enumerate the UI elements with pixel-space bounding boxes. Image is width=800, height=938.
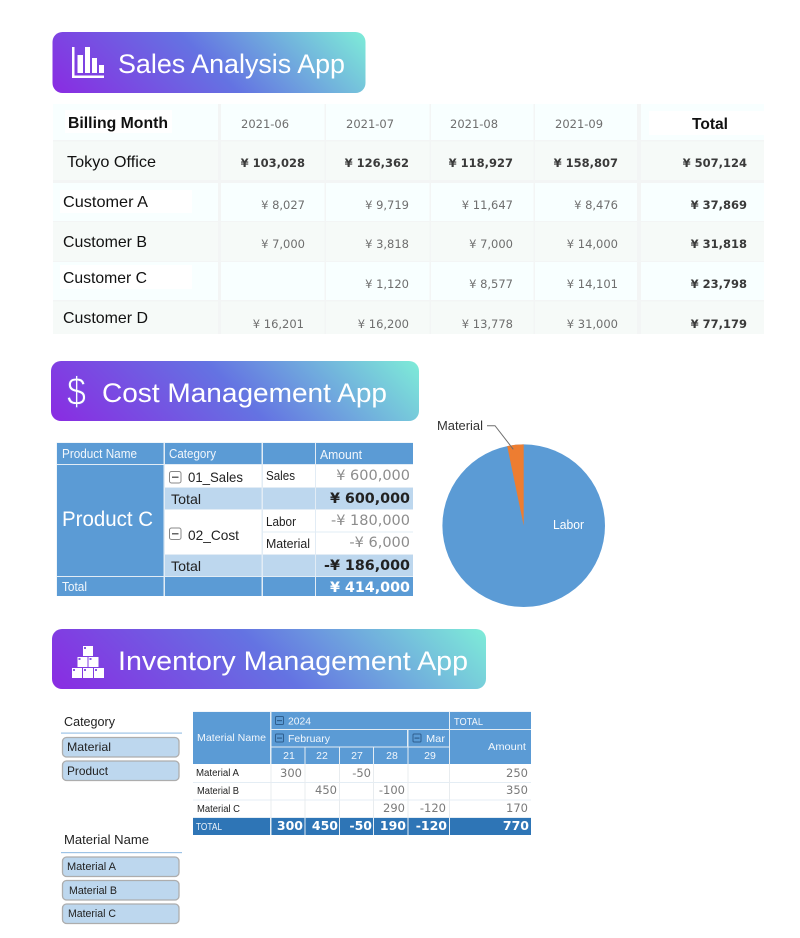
banner: Sales Analysis App xyxy=(52,32,366,93)
group: 02_Cost: -¥ 180,000 xyxy=(331,513,410,529)
pie chart: labor vs material xyxy=(437,419,605,607)
column headers xyxy=(197,716,526,762)
slicer: Category xyxy=(61,714,182,780)
grand total: ¥ 414,000 xyxy=(330,580,410,596)
group: 02_Cost: Material xyxy=(266,537,310,551)
heading: Cost Management App: Cost Management App xyxy=(102,378,387,408)
header row: Total xyxy=(692,116,728,133)
row: Customer C: ¥ 1,120 xyxy=(365,277,409,291)
slicer button: Material C: Material C xyxy=(68,908,116,920)
grand total: Total xyxy=(62,580,87,594)
banner: Cost Management App xyxy=(51,361,419,421)
group: 01_Sales: Total xyxy=(171,491,201,507)
column headers: 29 xyxy=(424,750,436,762)
row: Customer C: ¥ 23,798 xyxy=(691,277,747,291)
header row: 2021-08 xyxy=(450,117,498,131)
table headers: Product Name xyxy=(62,447,137,461)
group: 02_Cost: 02_Cost xyxy=(188,527,239,543)
column headers: 27 xyxy=(351,750,363,762)
row: Customer A xyxy=(63,194,747,212)
group: 01_Sales: ¥ 600,000 xyxy=(330,491,410,507)
table: inventory pivot xyxy=(193,712,531,835)
slicer: Material Name: Material Name xyxy=(64,832,149,847)
row: Tokyo Office: ¥ 507,124 xyxy=(683,156,747,170)
row: Customer A: ¥ 8,027 xyxy=(261,198,305,212)
icon: bar chart xyxy=(72,47,104,78)
group: 02_Cost: -¥ 186,000 xyxy=(324,558,410,574)
row: Customer C: Customer C xyxy=(63,270,147,287)
column headers: Mar xyxy=(426,733,446,745)
group: 01_Sales xyxy=(170,468,410,507)
row: Material C: 290 xyxy=(383,801,405,815)
table: billing by customer xyxy=(53,104,764,334)
row: Tokyo Office xyxy=(67,154,747,171)
row: Customer D: ¥ 16,200 xyxy=(358,317,409,331)
row: Customer D: ¥ 13,778 xyxy=(462,317,513,331)
header row: 2021-09 xyxy=(555,117,603,131)
row: TOTAL: -120 xyxy=(416,818,447,833)
group: 02_Cost: Labor xyxy=(266,515,296,529)
row: Customer D xyxy=(63,310,747,331)
row: TOTAL: 770 xyxy=(503,818,529,833)
row: Customer D: Customer D xyxy=(63,310,148,327)
column headers: 28 xyxy=(386,750,398,762)
row: TOTAL: 450 xyxy=(312,818,338,833)
row: Material B: 450 xyxy=(315,783,337,797)
row: Material C xyxy=(197,801,528,815)
row: Customer A: ¥ 37,869 xyxy=(691,198,747,212)
row: Material A xyxy=(196,766,528,780)
row: Customer B: Customer B xyxy=(63,234,147,251)
product name: Product C xyxy=(62,508,153,531)
row: TOTAL: TOTAL xyxy=(196,822,222,833)
row: Tokyo Office: ¥ 103,028 xyxy=(241,156,305,170)
slicer button: Material A: Material A xyxy=(67,861,117,873)
row: Material B: 350 xyxy=(506,783,528,797)
row: TOTAL: 190 xyxy=(380,818,406,833)
row: Customer B xyxy=(63,234,747,251)
column headers: Material Name xyxy=(197,732,266,744)
slicer button: Material B: Material B xyxy=(69,885,117,897)
slicer button: Product: Product xyxy=(67,764,109,778)
row: Material A: Material A xyxy=(196,768,239,779)
row: Customer C xyxy=(63,270,747,291)
row: Tokyo Office: ¥ 158,807 xyxy=(554,156,618,170)
row: Material A: -50 xyxy=(352,766,371,780)
table headers: Category xyxy=(169,447,217,461)
row: Material B: Material B xyxy=(197,786,239,797)
column headers: 2024 xyxy=(288,716,311,728)
group: 01_Sales: 01_Sales xyxy=(188,469,243,485)
row: Customer C: ¥ 14,101 xyxy=(567,277,618,291)
row: Material C: 170 xyxy=(506,801,528,815)
heading: Inventory Management App: Inventory Management App xyxy=(118,646,468,676)
group: 02_Cost: -¥ 6,000 xyxy=(349,535,410,551)
column headers: 21 xyxy=(283,750,295,762)
row: Customer B: ¥ 14,000 xyxy=(567,237,618,251)
icon: stacked boxes xyxy=(72,646,104,678)
slicer: Category: Category xyxy=(64,714,115,729)
row: Tokyo Office: ¥ 118,927 xyxy=(449,156,513,170)
row: TOTAL: 300 xyxy=(277,818,303,833)
icon: dollar sign: $ xyxy=(67,370,86,414)
table: product cost pivot xyxy=(56,442,413,596)
row: Material A: 300 xyxy=(280,766,302,780)
slicer: Material Name xyxy=(61,832,182,924)
column headers: 22 xyxy=(316,750,328,762)
row: Customer A: Customer A xyxy=(63,194,148,211)
row: Tokyo Office: ¥ 126,362 xyxy=(345,156,409,170)
header row: 2021-07 xyxy=(346,117,394,131)
row: Customer B: ¥ 7,000 xyxy=(469,237,513,251)
row: Customer B: ¥ 31,818 xyxy=(691,237,747,251)
header row xyxy=(68,115,728,133)
row: Customer D: ¥ 77,179 xyxy=(691,317,747,331)
row: Customer A: ¥ 9,719 xyxy=(365,198,409,212)
banner: Inventory Management App xyxy=(52,629,486,689)
grand total xyxy=(62,580,410,596)
header row: Billing Month xyxy=(68,115,168,132)
row: TOTAL xyxy=(196,818,529,833)
column headers: Amount xyxy=(488,741,526,753)
row: Tokyo Office: Tokyo Office xyxy=(67,154,156,171)
row: Material B xyxy=(197,783,528,797)
group: 01_Sales: Sales xyxy=(266,469,295,483)
pie label: Labor: Labor xyxy=(553,518,584,532)
column headers: TOTAL xyxy=(454,716,483,728)
row: Customer A: ¥ 11,647 xyxy=(462,198,513,212)
row: Customer D: ¥ 16,201 xyxy=(253,317,304,331)
heading: Sales Analysis App: Sales Analysis App xyxy=(118,49,345,79)
row: Customer D: ¥ 31,000 xyxy=(567,317,618,331)
table headers xyxy=(62,447,362,462)
group: 02_Cost xyxy=(170,513,410,574)
row: Customer B: ¥ 7,000 xyxy=(261,237,305,251)
row: Material B: -100 xyxy=(379,783,405,797)
row: Customer A: ¥ 8,476 xyxy=(574,198,618,212)
row: Customer C: ¥ 8,577 xyxy=(469,277,513,291)
column headers: February xyxy=(288,733,331,745)
row: Material C: -120 xyxy=(420,801,446,815)
group: 01_Sales: ¥ 600,000 xyxy=(336,468,410,484)
group: 02_Cost: Total xyxy=(171,558,201,574)
header row: 2021-06 xyxy=(241,117,289,131)
row: TOTAL: -50 xyxy=(349,818,372,833)
slicer button: Material: Material xyxy=(67,740,111,754)
row: Customer B: ¥ 3,818 xyxy=(365,237,409,251)
row: Material A: 250 xyxy=(506,766,528,780)
pie label: Material: Material xyxy=(437,419,483,433)
row: Material C: Material C xyxy=(197,804,240,815)
table headers: Amount xyxy=(320,448,362,462)
